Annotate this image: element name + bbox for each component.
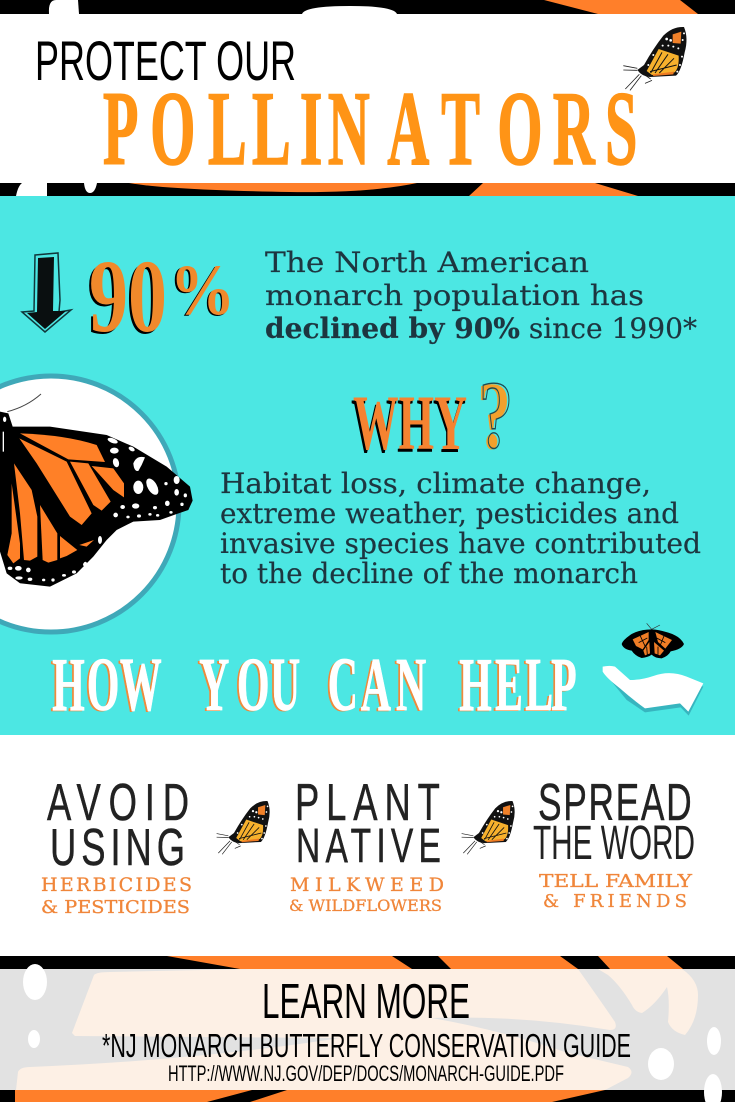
stat: 90 percent: 90 bbox=[87, 241, 165, 356]
action: plant native milkweed: & WILDFLOWERS bbox=[289, 896, 442, 915]
action: avoid using herbicides: HERBICIDES bbox=[41, 874, 192, 896]
action: plant native milkweed: MILKWEED bbox=[290, 874, 444, 896]
heading: pollinators: POLLINATORS bbox=[103, 70, 637, 188]
stat: 90 percent: % bbox=[170, 250, 235, 330]
text: decline statistic bbox=[265, 246, 697, 345]
text: causes of decline: Habitat loss, climate change, bbox=[220, 467, 651, 500]
heading: protect our: PROTECT OUR bbox=[35, 29, 296, 92]
top striped band bbox=[0, 0, 735, 196]
heading: why: ? bbox=[477, 362, 511, 469]
text: decline statistic: declined by 90% since 1990* bbox=[265, 312, 697, 345]
text: causes of decline: to the decline of the monarch bbox=[220, 557, 638, 590]
stat: 90 percent bbox=[87, 239, 235, 356]
heading: why: WHY bbox=[351, 382, 466, 469]
heading: why bbox=[351, 361, 513, 469]
action: plant native milkweed bbox=[289, 772, 444, 915]
heading: learn more: LEARN MORE bbox=[262, 975, 470, 1029]
teal panel bbox=[0, 196, 735, 735]
heading: how you can help: HOW YOU CAN HELP bbox=[52, 643, 577, 727]
action: plant native milkweed: NATIVE bbox=[296, 818, 441, 872]
action: avoid using herbicides: USING bbox=[50, 817, 185, 877]
white action panel bbox=[0, 735, 735, 956]
action: avoid using herbicides bbox=[41, 772, 192, 918]
text: causes of decline: invasive species have contributed bbox=[220, 527, 701, 560]
circle with monarch wing bbox=[0, 376, 193, 632]
icon: butterfly left bbox=[217, 801, 270, 854]
icon: title butterfly bbox=[623, 27, 687, 90]
footer striped band bbox=[0, 956, 735, 1102]
icon: butterfly right bbox=[462, 801, 515, 854]
heading: why: ? bbox=[479, 361, 513, 468]
icon: top-view butterfly bbox=[622, 623, 684, 658]
text: causes of decline bbox=[220, 467, 701, 590]
action: avoid using herbicides: & PESTICIDES bbox=[41, 897, 190, 918]
action: avoid using herbicides: AVOID bbox=[47, 772, 189, 832]
text: causes of decline: extreme weather, pesticides and bbox=[220, 497, 679, 530]
action: plant native milkweed: PLANT bbox=[295, 772, 440, 832]
icon: open hand bbox=[603, 666, 703, 716]
stat: 90 percent: 90 bbox=[89, 239, 167, 354]
heading: why: WHY bbox=[353, 379, 467, 466]
heading: how you can help: HOW YOU CAN HELP bbox=[50, 644, 575, 728]
action: spread the word bbox=[533, 774, 695, 912]
action: spread the word: & FRIENDS bbox=[543, 891, 687, 912]
action: spread the word: SPREAD bbox=[538, 774, 692, 832]
action: spread the word: TELL FAMILY bbox=[539, 871, 693, 892]
icon: down arrow bbox=[22, 253, 71, 332]
icon: monarch wing bbox=[0, 394, 193, 587]
text: decline statistic: The North American bbox=[265, 246, 589, 279]
text: decline statistic: monarch population has bbox=[265, 279, 644, 312]
title banner bbox=[0, 14, 735, 183]
stat: 90 percent: % bbox=[168, 251, 234, 331]
